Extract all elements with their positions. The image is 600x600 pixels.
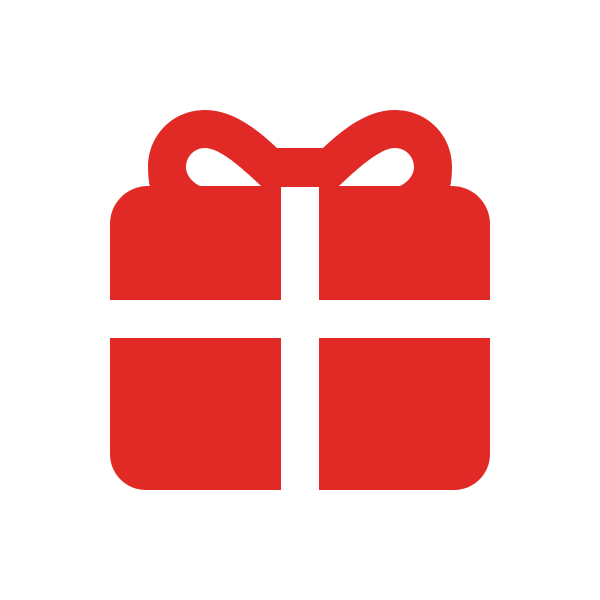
- ribbon bow: [148, 110, 452, 187]
- box panel: top left: [110, 186, 281, 300]
- box panel: bottom right: [319, 338, 490, 490]
- box panel: top right: [319, 186, 490, 300]
- gift icon group: [110, 110, 490, 490]
- box panel: bottom left: [110, 338, 281, 490]
